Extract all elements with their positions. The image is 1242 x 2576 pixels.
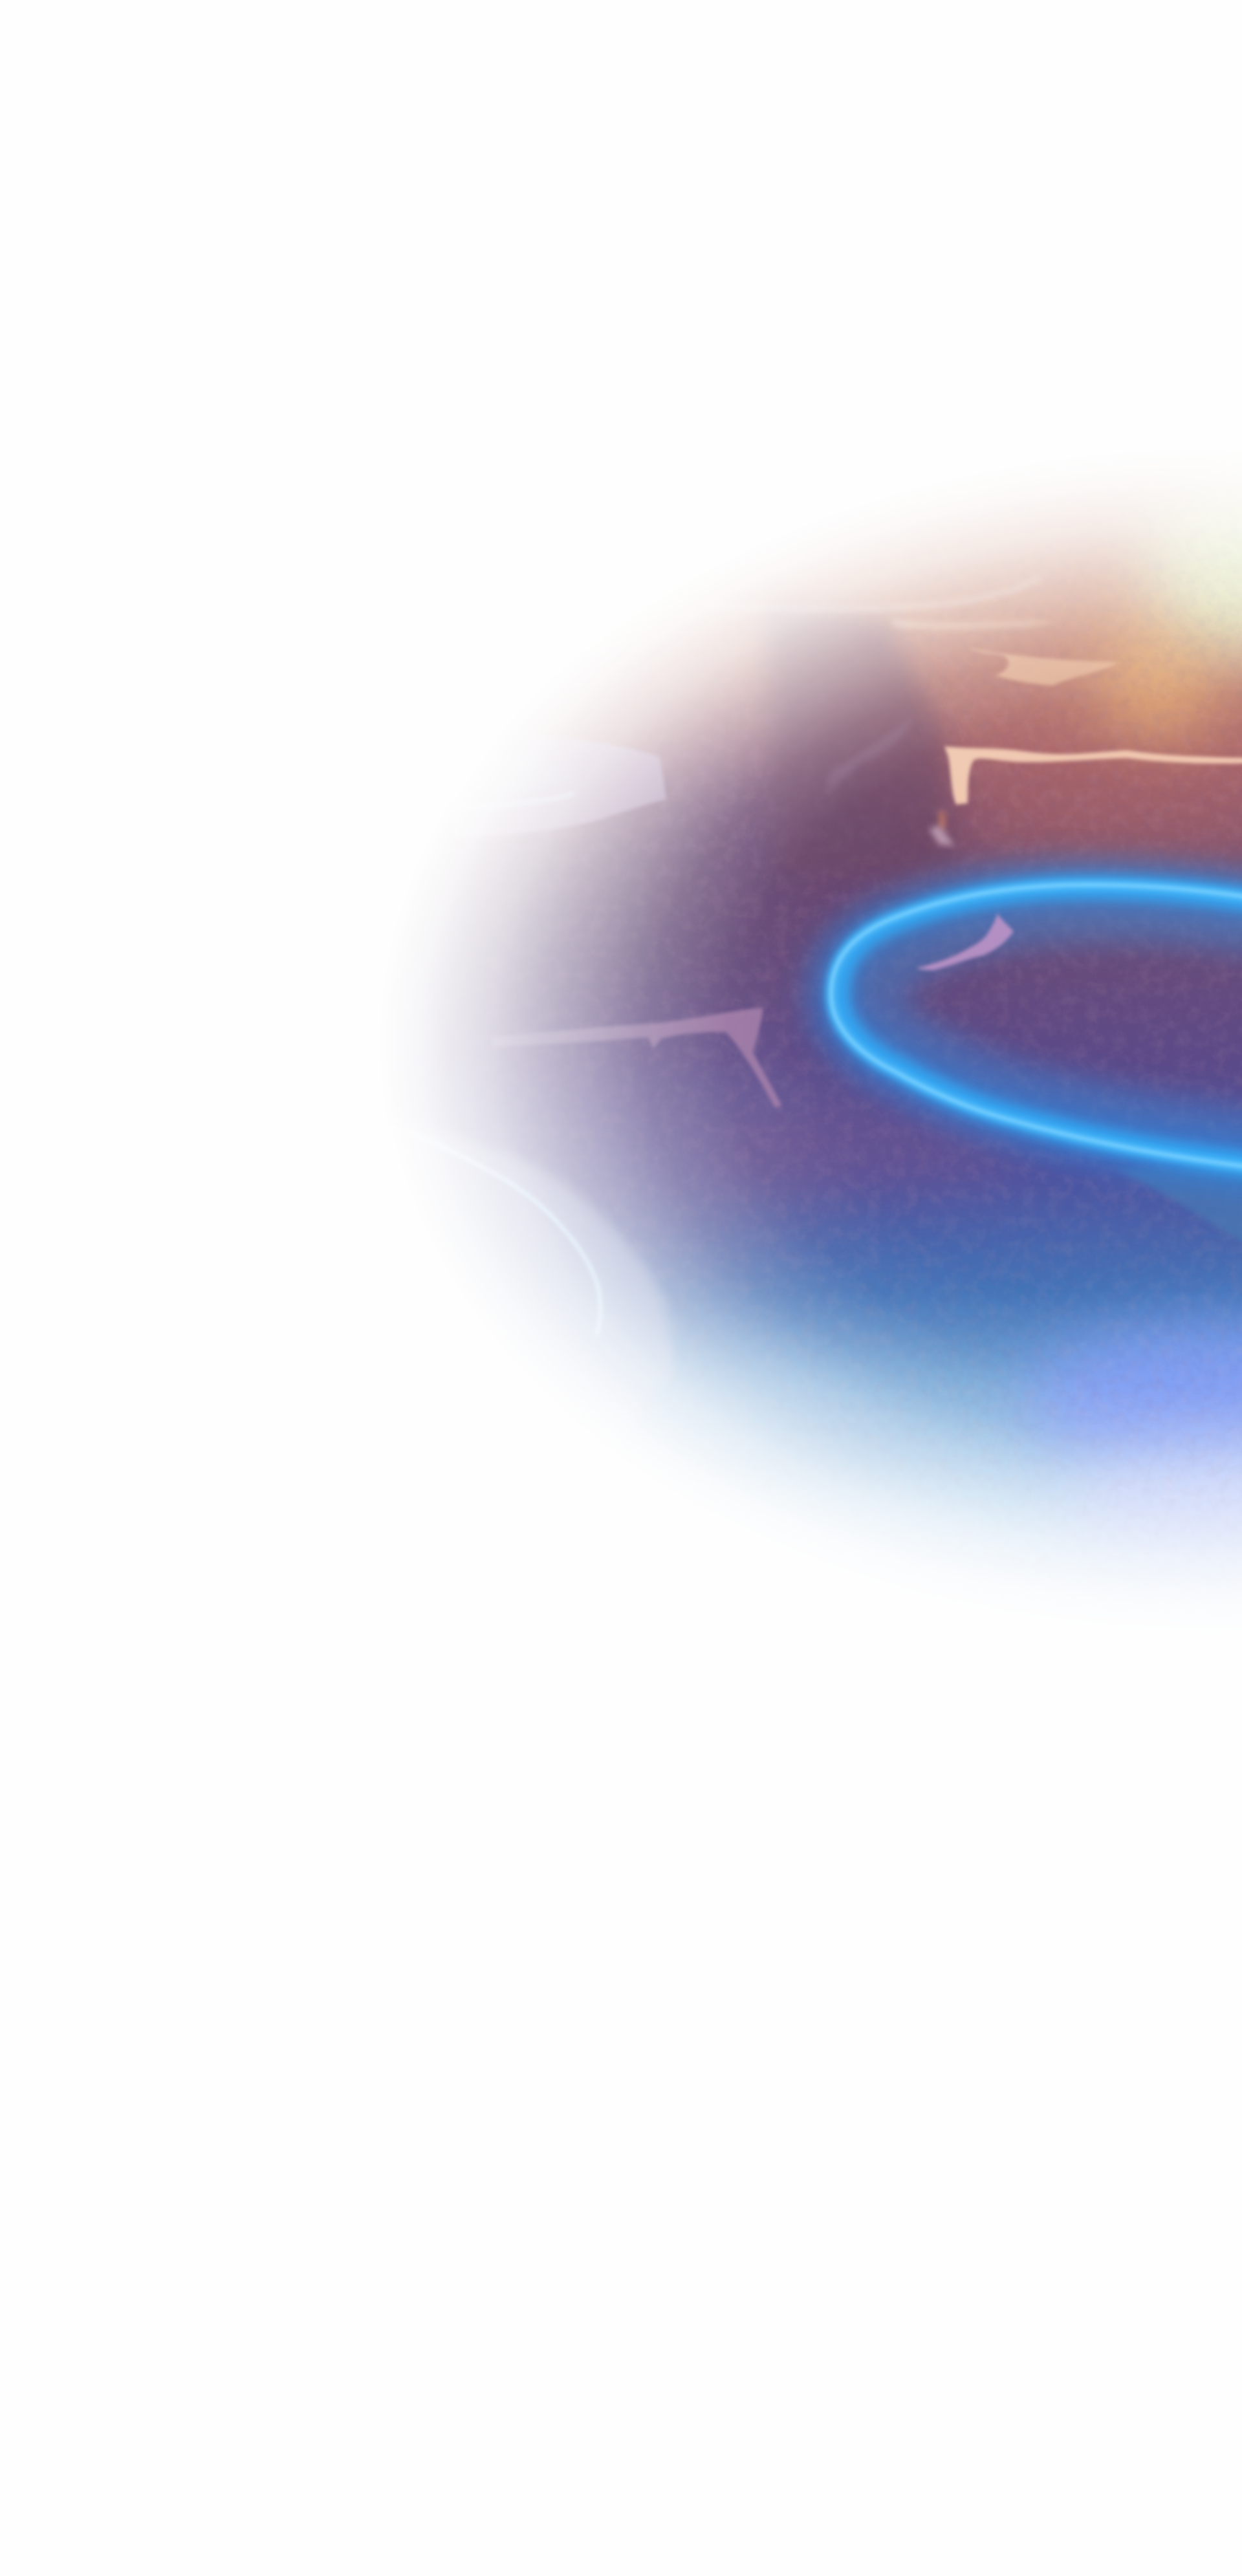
far shore band xyxy=(893,620,1061,629)
landscape base colour wash xyxy=(422,488,1242,1579)
faint ring arc at upper left xyxy=(453,793,574,807)
faint ring arc at top xyxy=(704,577,1038,609)
upper lake xyxy=(968,647,1120,686)
forest texture xyxy=(651,643,1242,1444)
photo panel: aerial landscape fading into the page xyxy=(419,488,1242,1588)
page illustration xyxy=(419,488,1242,1588)
pale river at upper left xyxy=(453,737,666,838)
inlet below the cliff xyxy=(929,811,955,846)
rocky cliff streaks xyxy=(825,718,912,797)
faint ring arc at lower left xyxy=(408,1132,600,1335)
sandbar inside the ring xyxy=(916,913,1014,970)
glowing blue ring xyxy=(831,885,1242,1169)
cliff headland xyxy=(767,614,955,872)
pale water at lower left xyxy=(323,1112,673,1488)
water channel at lower right xyxy=(1113,1167,1242,1245)
colour glows over the landscape xyxy=(529,506,1242,1518)
lower left river xyxy=(492,1008,781,1107)
main river xyxy=(944,746,1242,805)
island in the pale river xyxy=(453,748,574,802)
